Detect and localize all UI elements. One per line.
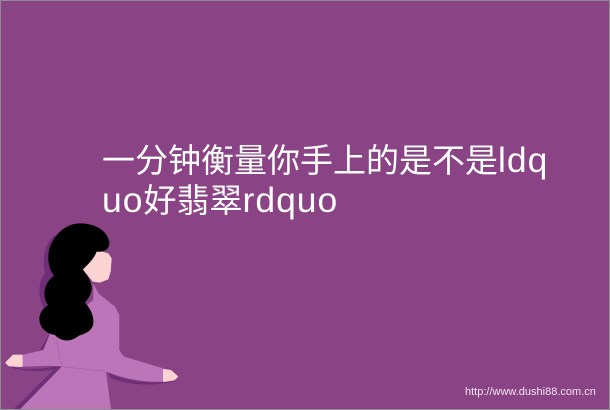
title line 1: 一分钟衡量你手上的是不是ldq xyxy=(102,140,548,180)
watermark url: http://www.dushi88.com.cn xyxy=(465,386,596,398)
dress xyxy=(20,283,163,409)
title line 2: uo好翡翠rdquo xyxy=(102,180,338,220)
arm shadows xyxy=(6,365,177,385)
hair shadow xyxy=(39,235,67,350)
skirt shadow xyxy=(13,367,63,409)
illustration: woman with long black hair xyxy=(5,223,178,409)
right hand xyxy=(164,370,177,381)
face xyxy=(83,250,112,283)
hair xyxy=(39,223,109,340)
left hand xyxy=(6,356,22,366)
dress seams xyxy=(57,340,105,371)
